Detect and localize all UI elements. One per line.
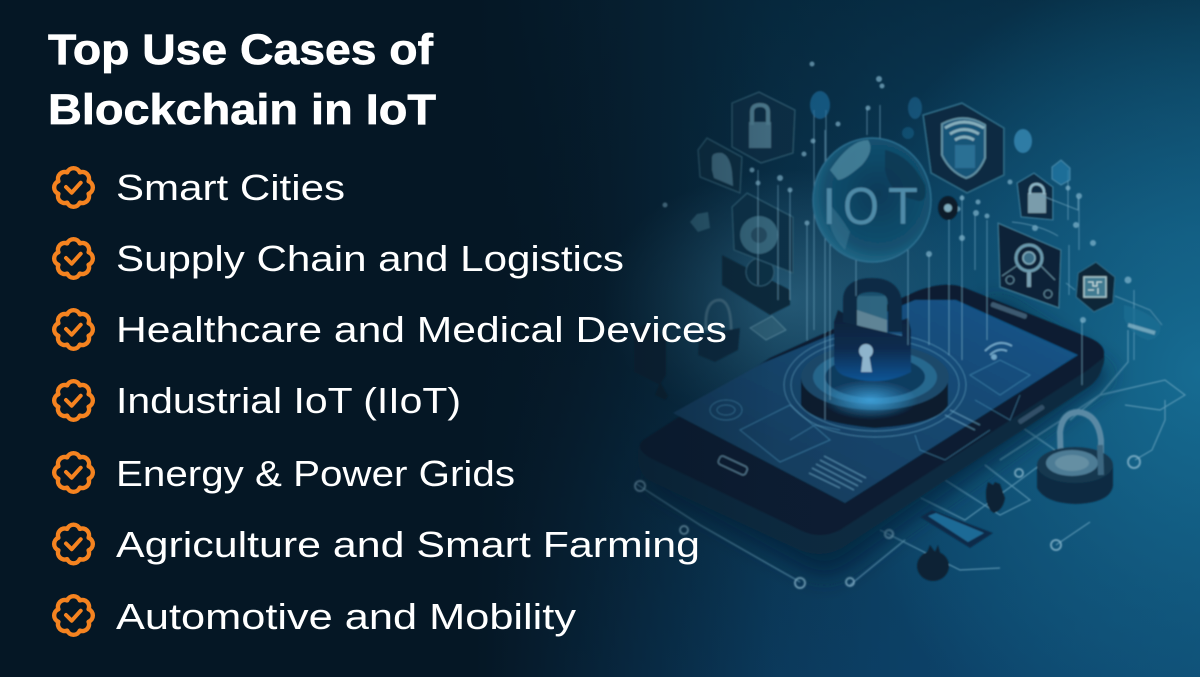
second padlock — [1037, 412, 1113, 504]
chip — [920, 510, 993, 548]
QR hexagon — [1076, 262, 1115, 312]
small lock hexagon — [1017, 173, 1053, 220]
list item: Smart Cities: Smart Cities — [116, 167, 345, 208]
title: Top Use Cases of — [48, 26, 434, 74]
shield hexagon — [923, 103, 1004, 193]
title — [48, 26, 436, 134]
list item: Smart Cities — [54, 167, 345, 208]
magnifier panel — [998, 223, 1061, 308]
left faded scene — [634, 255, 790, 400]
globe with IOT: O — [843, 178, 879, 236]
circuit lines upper right — [1012, 195, 1162, 325]
circuit nodes — [635, 456, 1140, 588]
list item: Agriculture and Smart Farming: Agriculture and Smart Farming — [116, 524, 700, 565]
small knobs — [917, 482, 1005, 581]
phone body — [638, 285, 1104, 554]
globe with IOT: T — [888, 178, 918, 236]
vertical data lines — [758, 105, 1134, 420]
list item: Industrial IoT (IIoT): Industrial IoT (IIoT) — [116, 380, 461, 421]
floating small icons — [810, 91, 1160, 340]
left hex panels — [690, 92, 795, 273]
wifi badge on screen — [985, 343, 1012, 359]
list item: Energy & Power Grids: Energy & Power Grids — [116, 453, 515, 494]
list item: Supply Chain and Logistics: Supply Chain and Logistics — [116, 238, 624, 279]
globe with IOT — [813, 138, 931, 262]
list item: Healthcare and Medical Devices: Healthcare and Medical Devices — [116, 309, 727, 350]
data line dots — [662, 62, 1132, 323]
globe with IOT: I — [822, 178, 836, 236]
circuit traces on table — [635, 330, 1185, 585]
speaker — [990, 302, 1028, 319]
illustration: IoT security phone scene — [634, 62, 1185, 588]
list item: Automotive and Mobility: Automotive and Mobility — [116, 596, 576, 637]
ring rings — [784, 333, 966, 437]
main padlock — [834, 285, 911, 381]
home button — [717, 455, 748, 476]
lock base disk — [801, 378, 948, 428]
phone shadow — [640, 300, 1115, 576]
left fade overlay — [0, 0, 880, 677]
phone screen — [673, 300, 1078, 503]
title: Blockchain in IoT — [48, 86, 436, 134]
